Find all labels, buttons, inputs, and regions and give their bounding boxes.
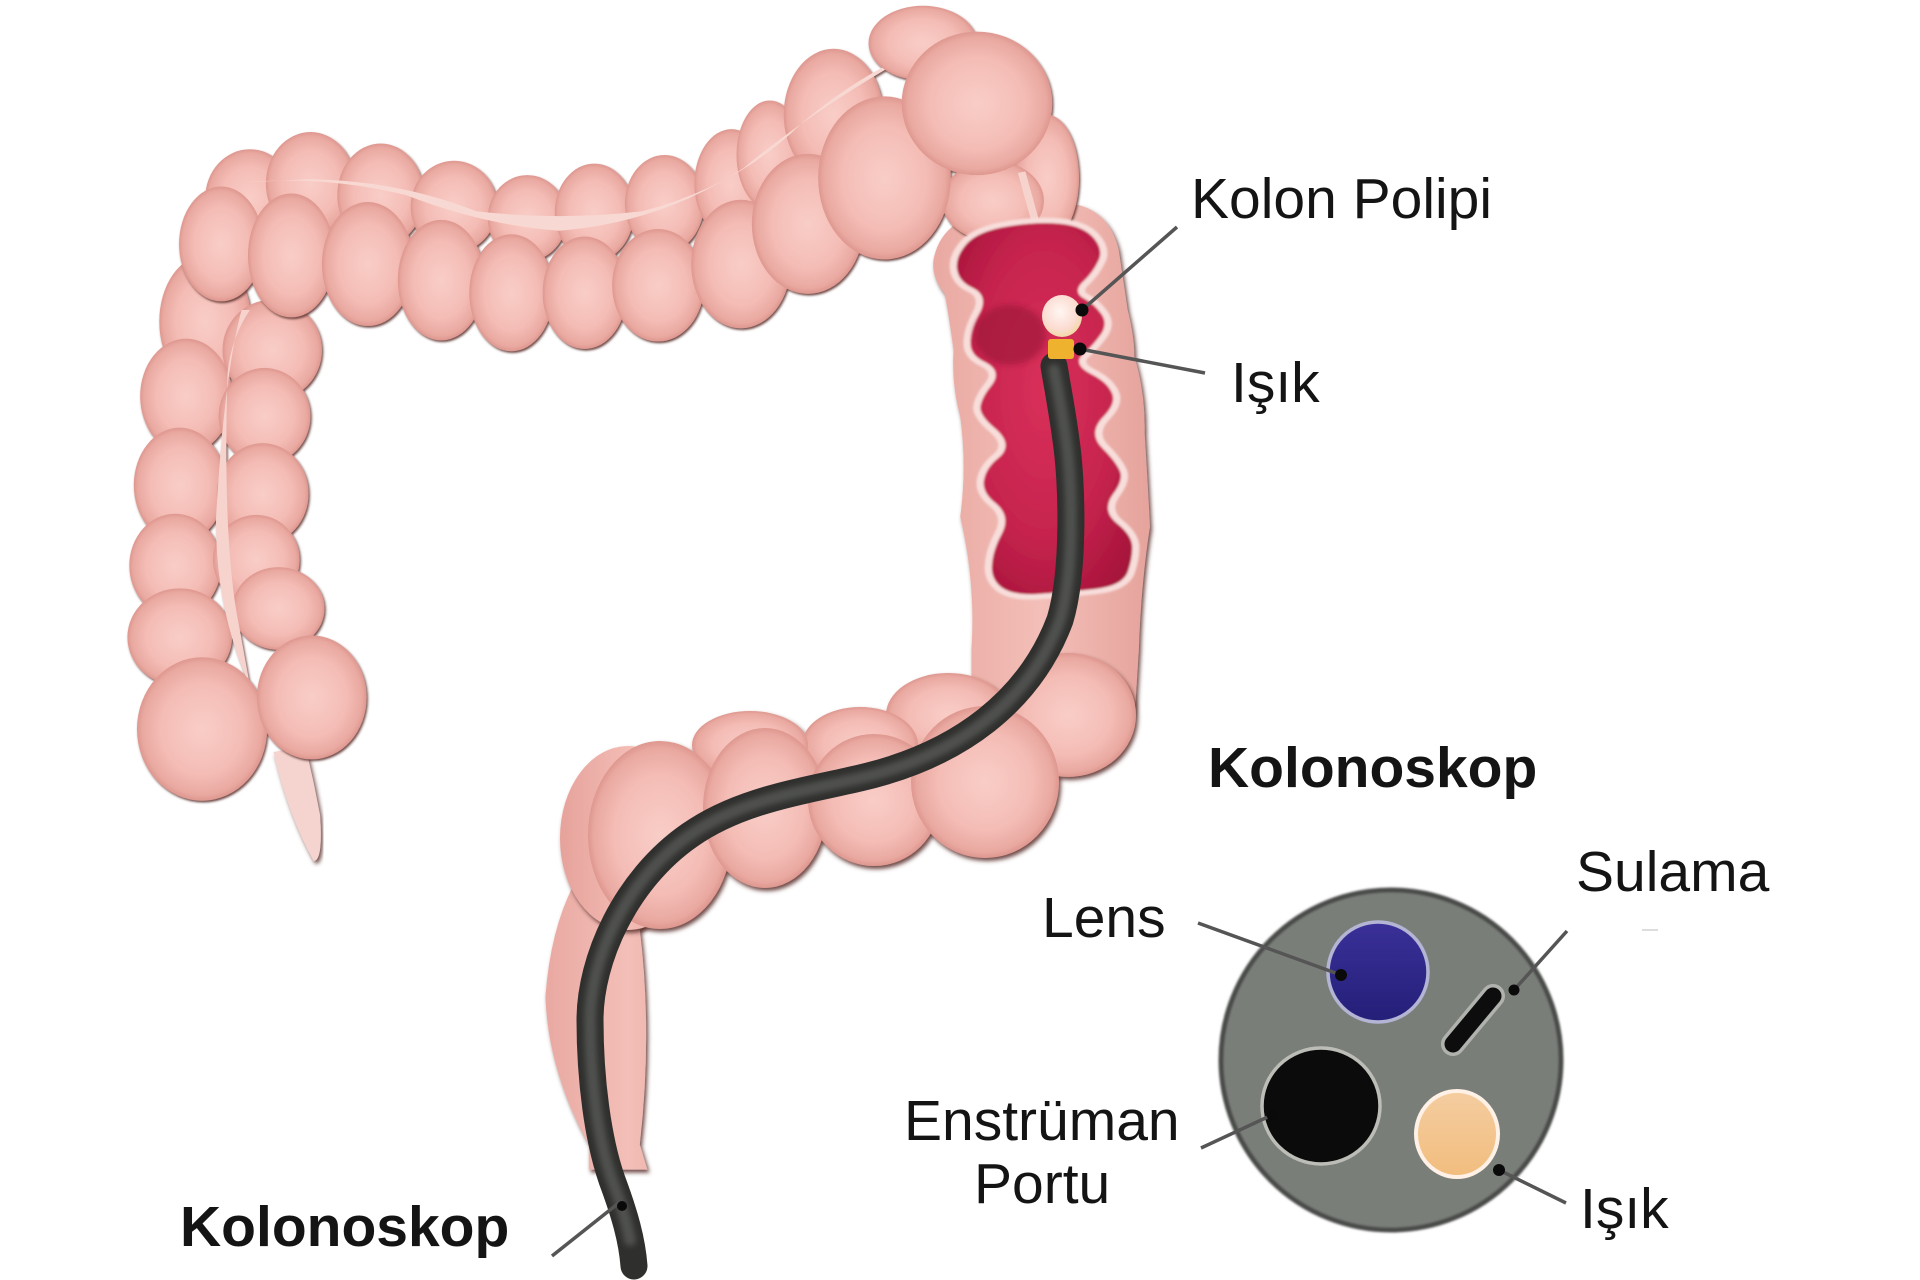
disc	[1221, 890, 1561, 1230]
appendix	[273, 746, 321, 861]
callout: Işık port	[1493, 1164, 1669, 1241]
callout: Sulama	[1508, 840, 1770, 996]
scope cross-section	[1221, 890, 1561, 1230]
lens port	[1328, 922, 1428, 1022]
callout: Lens: Lens	[1042, 886, 1166, 950]
dark shading behind polyp	[974, 305, 1046, 365]
callout: Lens	[1042, 886, 1347, 981]
descending colon wall	[933, 205, 1150, 740]
polyp	[1042, 295, 1082, 337]
transverse colon	[179, 6, 1079, 351]
callout: Kolon Polipi	[1076, 167, 1492, 316]
callout: Işık: Işık	[1231, 351, 1320, 415]
irrigation slot	[1453, 996, 1493, 1044]
inner lumen	[953, 220, 1136, 597]
callout: Kolonoskop tube label: Kolonoskop	[180, 1195, 509, 1259]
rectum	[545, 848, 711, 1170]
ascending colon and cecum	[127, 255, 367, 801]
callout: Işık	[1074, 342, 1320, 415]
heading: Kolonoskop: Kolonoskop	[1208, 736, 1537, 800]
instrument port	[1262, 1048, 1380, 1164]
callout: Enstrüman Portu	[904, 1089, 1278, 1216]
colon illustration	[127, 6, 1150, 1266]
callout: Işık port: Işık	[1580, 1177, 1669, 1241]
cutaway section of descending colon	[953, 220, 1136, 597]
callout: Sulama: Sulama	[1576, 840, 1770, 904]
callout: Kolon Polipi: Kolon Polipi	[1191, 167, 1492, 231]
light port	[1416, 1091, 1498, 1177]
callout: Enstrüman Portu: Enstrüman	[904, 1089, 1180, 1153]
scope light	[1048, 339, 1074, 359]
sigmoid colon	[560, 653, 1136, 930]
callout: Enstrüman Portu: Portu	[974, 1152, 1110, 1216]
colonoscope tube	[590, 366, 1071, 1266]
